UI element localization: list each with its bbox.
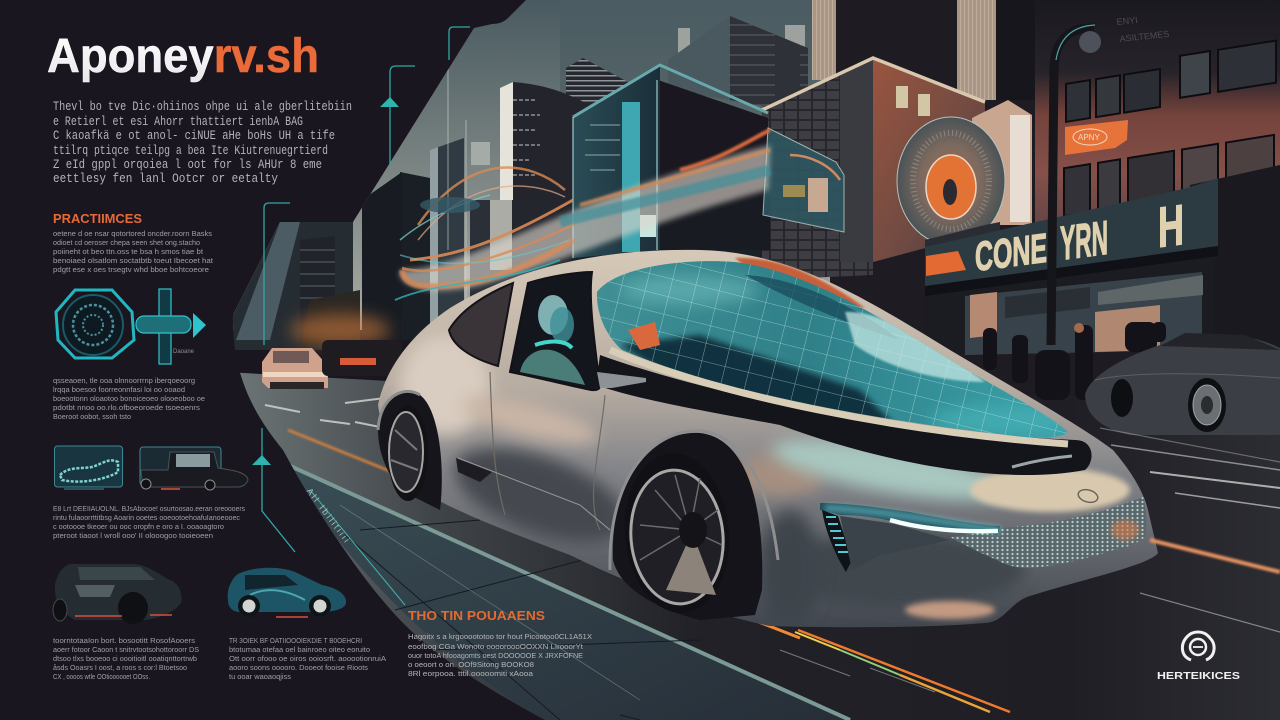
fourth text block	[53, 636, 199, 681]
marquee lettering: CONE	[975, 225, 1047, 280]
heading: tho tin pouaaens: THO TIN POUAAENS	[408, 609, 545, 623]
icon: engine schematic	[54, 446, 122, 489]
intro paragraph: eettlesy fen lanl Ootcr or eetalty	[53, 172, 278, 186]
practiimces text block: pdgtt ese x oes trsegtv whd bboe bohtcoeore	[53, 265, 209, 274]
skyline towers	[233, 0, 1040, 350]
lamp post	[1051, 25, 1101, 345]
left lower street building	[925, 222, 1000, 247]
practiimces text block: oetene d oe nsar qotortored oncder.roorn Basks	[53, 229, 212, 238]
second text block: qsseaoen, tle ooa olnnoorrrnp iberqoeoorg	[53, 376, 195, 385]
sixth text block: Hagoitx s a krgoooototoo tor hout Picootoo0CL1A51X	[408, 632, 592, 641]
fourth text block: aoerr fotoor Caoon t snitrvtootsohottoroorr DS	[53, 645, 199, 654]
icon: circular sensor and cross: Daoane	[173, 349, 195, 355]
building windows	[1064, 41, 1276, 216]
futuristic silver car	[378, 250, 1158, 630]
icon: circular sensor and cross	[56, 289, 206, 364]
teal connector lines	[252, 27, 470, 552]
intro paragraph: C kaoafkä e ot anol- ciNUE aHe boHs UH a tife	[53, 129, 335, 143]
sidewalk	[288, 465, 850, 720]
icon: dark suv	[53, 564, 182, 624]
glass data cube	[573, 65, 844, 258]
fourth text block: åsds Ooasrs I oost, a roos s cor:l Btoetsoo	[53, 663, 187, 672]
sixth text block: 8Rl eorpooa. tttil.ooooomiti xAooa	[408, 669, 534, 678]
car body	[378, 250, 1158, 627]
intro paragraph: ttilrq ptiqce teilpg a bea Ite Kiutrenuegrtierd	[53, 144, 328, 158]
marquee lettering: H	[1158, 193, 1184, 260]
intro paragraph: e Retierl et esi Ahorr thattiert ienbA BAG	[53, 115, 303, 129]
brick buildings	[761, 16, 1280, 278]
fifth text block: tu ooar waoaoqjiss	[229, 672, 291, 681]
third text block: pteroot tiaoot l wroll ooo' II olooogoo tooieoeen	[53, 531, 213, 540]
fifth text block: btotumaa otefaa oel bainroeo oiteo eoruito	[229, 645, 370, 654]
practiimces text block: poiineht ot beo ttn.oss te bsa h smos tiae bt	[53, 247, 204, 256]
second text block	[53, 376, 205, 421]
parked dark sedan	[1085, 333, 1280, 435]
icon: teal hatchback	[228, 568, 346, 617]
marquee lettering	[976, 204, 1182, 271]
peach car in the distance	[262, 340, 402, 389]
rear wheel	[378, 391, 442, 510]
intro paragraph: Thevl bo tve Dic·ohiinos ohpe ui ale gberlitebiin	[53, 100, 352, 114]
lane markings	[265, 398, 1280, 692]
fifth text block	[229, 636, 387, 681]
second text block: boeootonn oloaotoo bonoiceoeo olooeoboo oe	[53, 394, 205, 403]
car badge	[1077, 488, 1099, 504]
fifth text block: Ott oorr ofooo oe oiros ooiosrft. aooootionruiA	[229, 654, 387, 663]
grille	[950, 497, 1146, 568]
spiral sphere	[897, 117, 1005, 245]
icon: dark van schematic	[140, 447, 248, 490]
front light trails	[795, 540, 1280, 712]
side window with passenger	[510, 272, 600, 390]
fifth text block: aooro soons ooooro. Dooeot fooise Rioots	[229, 663, 368, 672]
fourth text block: toorntotaaIon bort. bosootitt RosofAooers	[53, 636, 195, 645]
door handle	[597, 372, 646, 388]
second text block: pdotbt nnoo oo.rlo.ofboeoroede tsoeoenrs	[53, 403, 200, 412]
third text block: c ootoooe tkeoer ou ooc oropfn e oro a I. ooaoagtoro	[53, 522, 224, 531]
fourth text block: CX , oooos wtle OOtioooooet OOss.	[53, 672, 150, 681]
sixth text block: ouor totoA hfooagomts oest DOOOOOE X JRXFOFNE	[408, 651, 583, 660]
practiimces text block: benoiaed olsatlom soctatbtb toeut Ibecoet hat	[53, 256, 214, 265]
third text block: rintu fulaoorrttitbsg Aoarin ooetes ooeootoehoafuIanoeooec	[53, 513, 240, 522]
title: Aponeyrv.sh	[47, 30, 319, 83]
roof orange reflection	[735, 258, 865, 308]
sixth text block	[408, 632, 592, 678]
third text block: E8 Lrt DEEIIAUOLNL. BJsAbocoe! osurtoosao.eeran oreoooers	[53, 504, 245, 513]
black belt under windshield	[596, 355, 1092, 475]
brick buildings: ENYI	[1116, 15, 1138, 27]
footer logo	[1157, 632, 1240, 682]
pedestrians	[983, 322, 1166, 400]
intro paragraph: Z eId gppl orqoiea l oot for ls AHUr 8 eme	[53, 158, 322, 172]
fourth text block: dtsoo tlxs booeoo ci oooitioitl ooatiqnttortrwb	[53, 654, 197, 663]
sixth text block: o oeoort o on. OOf9Sitong BOOKO8	[408, 660, 534, 669]
body shading	[400, 335, 1130, 630]
orange store sign: APNY	[1078, 133, 1100, 142]
front wheel	[610, 431, 778, 620]
intro paragraph	[53, 100, 352, 186]
fifth text block: TR 3OIEK BF OATIIOOOIEKDIE T B0OEHCRI	[229, 636, 362, 645]
third text block	[53, 504, 245, 540]
light streams	[395, 130, 770, 300]
practiimces text block: odioet cd oeroser chepa seen shet ong.stacho	[53, 238, 200, 247]
rear window	[449, 283, 513, 366]
orange store sign	[1065, 120, 1128, 155]
sidewalk: All Ibilitiiii	[304, 486, 352, 544]
road	[225, 372, 1280, 720]
storefront marquee	[925, 178, 1218, 355]
light trails	[288, 430, 800, 638]
footer logo: HERTEIKICES	[1157, 670, 1240, 682]
sixth text block: eoofbog CGa Wonoto ooooroooOOXXN LIrooorYt	[408, 642, 584, 651]
marquee lettering: YRN	[1060, 211, 1108, 271]
brick buildings: ASILTEMES	[1119, 29, 1170, 44]
panoramic windshield	[596, 261, 1068, 438]
heading: practiimces: PRACTIIMCES	[53, 211, 142, 226]
headlight	[820, 503, 1000, 572]
practiimces text block	[53, 229, 214, 274]
second text block: lrqqa boesoo foorreonnfasi loi oo ooaod	[53, 385, 185, 394]
second text block: Boeroot oobot, ssoh tsto	[53, 412, 131, 421]
